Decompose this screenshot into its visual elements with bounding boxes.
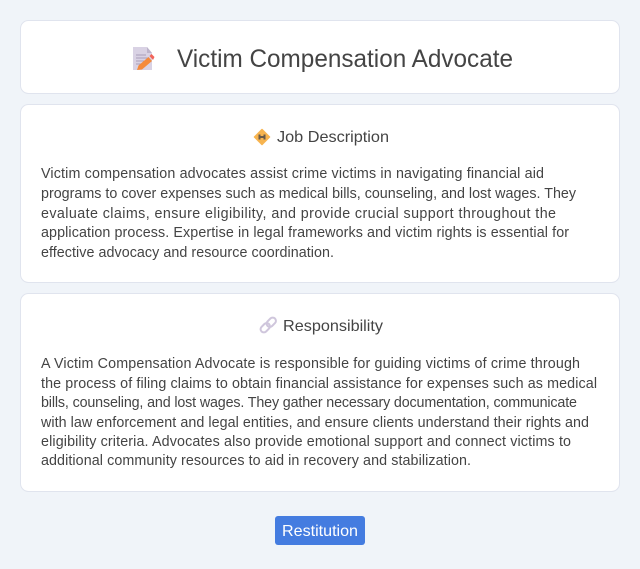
panel: responsibility (20, 294, 620, 492)
button: Restitution tag (275, 516, 365, 545)
text block: responsibility (40, 356, 597, 469)
text block: job description: programs to cover expenses such as medical bills, counseling, and lost wages. They (41, 186, 577, 202)
text block: responsibility: A Victim Compensation Advocate is responsible for guiding victims of crime through (41, 356, 580, 372)
text block: job description: application process. Expertise in legal frameworks and victim rights is essential for (41, 225, 569, 241)
panel: job description (20, 104, 620, 282)
text block: job description: Victim compensation advocates assist crime victims in navigating financial aid (41, 166, 544, 182)
text block: job description: effective advocacy and resource coordination. (41, 245, 334, 261)
text block: responsibility: with law enforcement and legal entities, and ensure clients understand their rights and (40, 415, 589, 431)
text block: job description: evaluate claims, ensure eligibility, and provide crucial support throughout the (41, 206, 556, 222)
heading: job description: Job Description (277, 129, 389, 146)
icon: chain link (259, 316, 277, 334)
panel: title (20, 20, 620, 94)
text block: responsibility: additional community resources to aid in recovery and stabilization. (41, 453, 471, 469)
button: Restitution tag: Restitution (282, 523, 358, 540)
heading: responsibility: Responsibility (283, 318, 383, 335)
text block: responsibility: bills, counseling, and lost wages. They gather necessary documentation, communicate (41, 395, 577, 411)
text block: job description (41, 166, 577, 261)
text block: responsibility: eligibility criteria. Advocates also provide emotional support and connect victims to (41, 434, 571, 450)
icon: diamond sign (254, 130, 270, 144)
heading: title: Victim Compensation Advocate (177, 45, 513, 73)
text block: responsibility: the process of filing claims to obtain financial assistance for expenses such as medical (41, 376, 597, 392)
icon: document with pencil (133, 47, 154, 70)
